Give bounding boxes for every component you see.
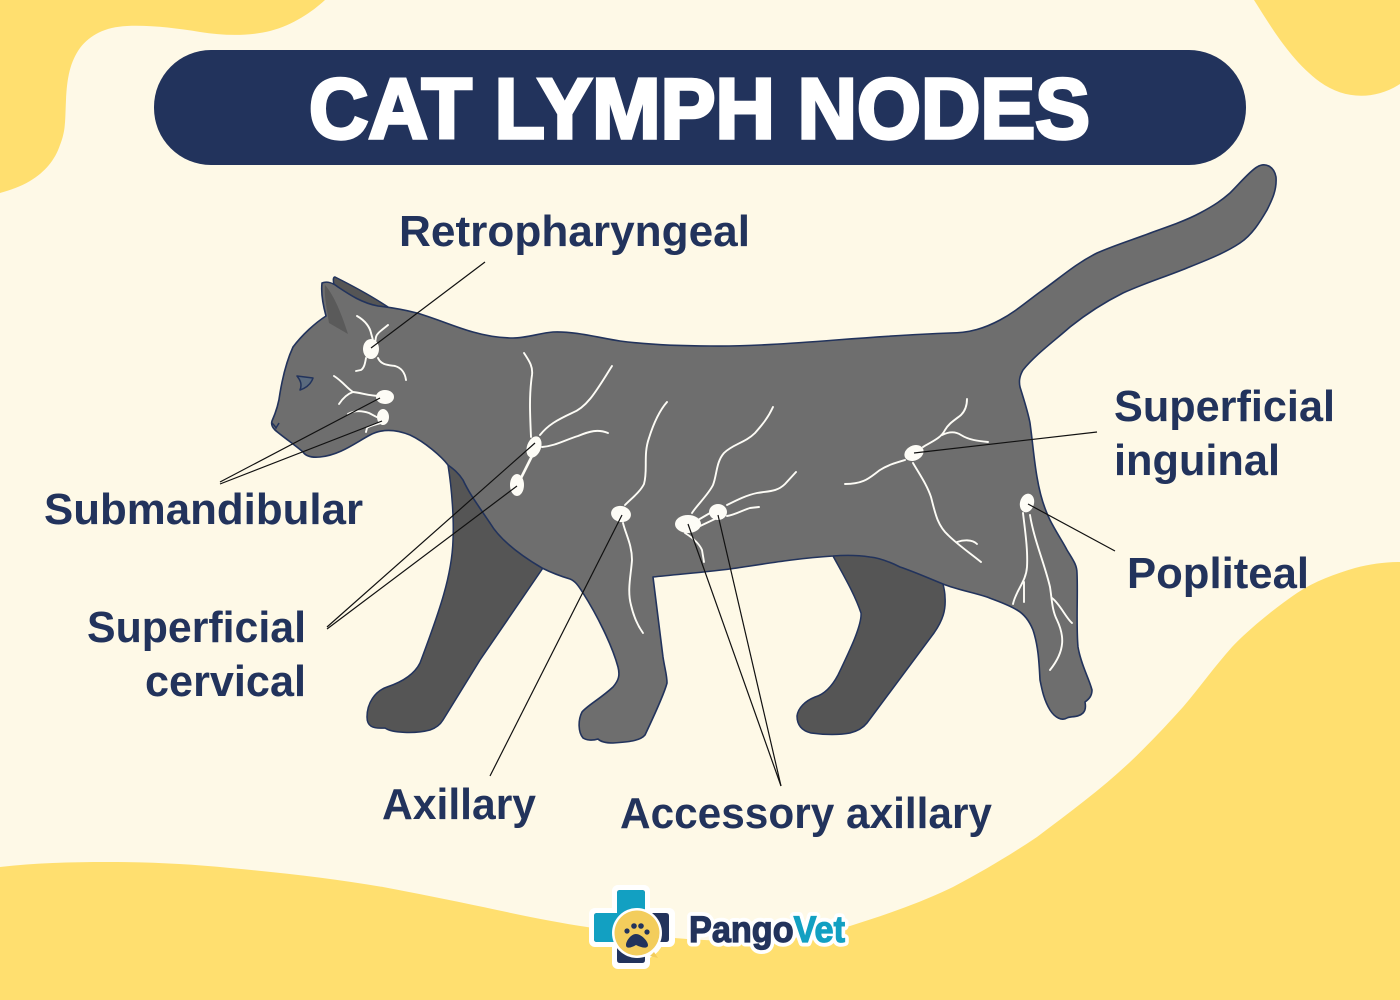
label: Superficial cervical: [87, 603, 306, 706]
main body silhouette: [272, 165, 1276, 743]
leader lines: [220, 262, 1115, 786]
label: Submandibular: Submandibular: [44, 485, 363, 534]
background blob: bottom: [0, 562, 1400, 1000]
illustration: cat body with lymph nodes: [272, 165, 1276, 743]
far hind leg: [797, 540, 945, 734]
wordmark: PangoVet: [689, 909, 845, 950]
lymph nodes: [363, 339, 1036, 533]
label: Superficial inguinal: [1114, 382, 1335, 485]
label: Popliteal: Popliteal: [1127, 549, 1309, 598]
label: Superficial cervical: Superficial: [87, 603, 306, 652]
mouth: [272, 423, 279, 428]
title: [154, 50, 1246, 165]
label: Superficial inguinal: inguinal: [1114, 436, 1280, 485]
background blob: top left: [0, 0, 325, 193]
label: Superficial inguinal: Superficial: [1114, 382, 1335, 431]
inner ear shading: [325, 285, 348, 334]
label: Axillary: Axillary: [382, 780, 537, 829]
wordmark fill: PangoVet: [689, 909, 845, 950]
label: Accessory axillary: Accessory axillary: [620, 789, 992, 838]
eye: [297, 376, 313, 390]
far front leg: [367, 465, 545, 732]
far ear: [333, 277, 388, 320]
title: CAT LYMPH NODES: [309, 62, 1090, 157]
label: Superficial cervical: cervical: [145, 657, 306, 706]
label: Retropharyngeal: Retropharyngeal: [399, 207, 750, 256]
lymph vessels: [334, 316, 1072, 670]
icon: cross with paw: [589, 885, 675, 969]
background blob: top right: [1254, 0, 1400, 96]
logo: PangoVet: [589, 885, 845, 969]
